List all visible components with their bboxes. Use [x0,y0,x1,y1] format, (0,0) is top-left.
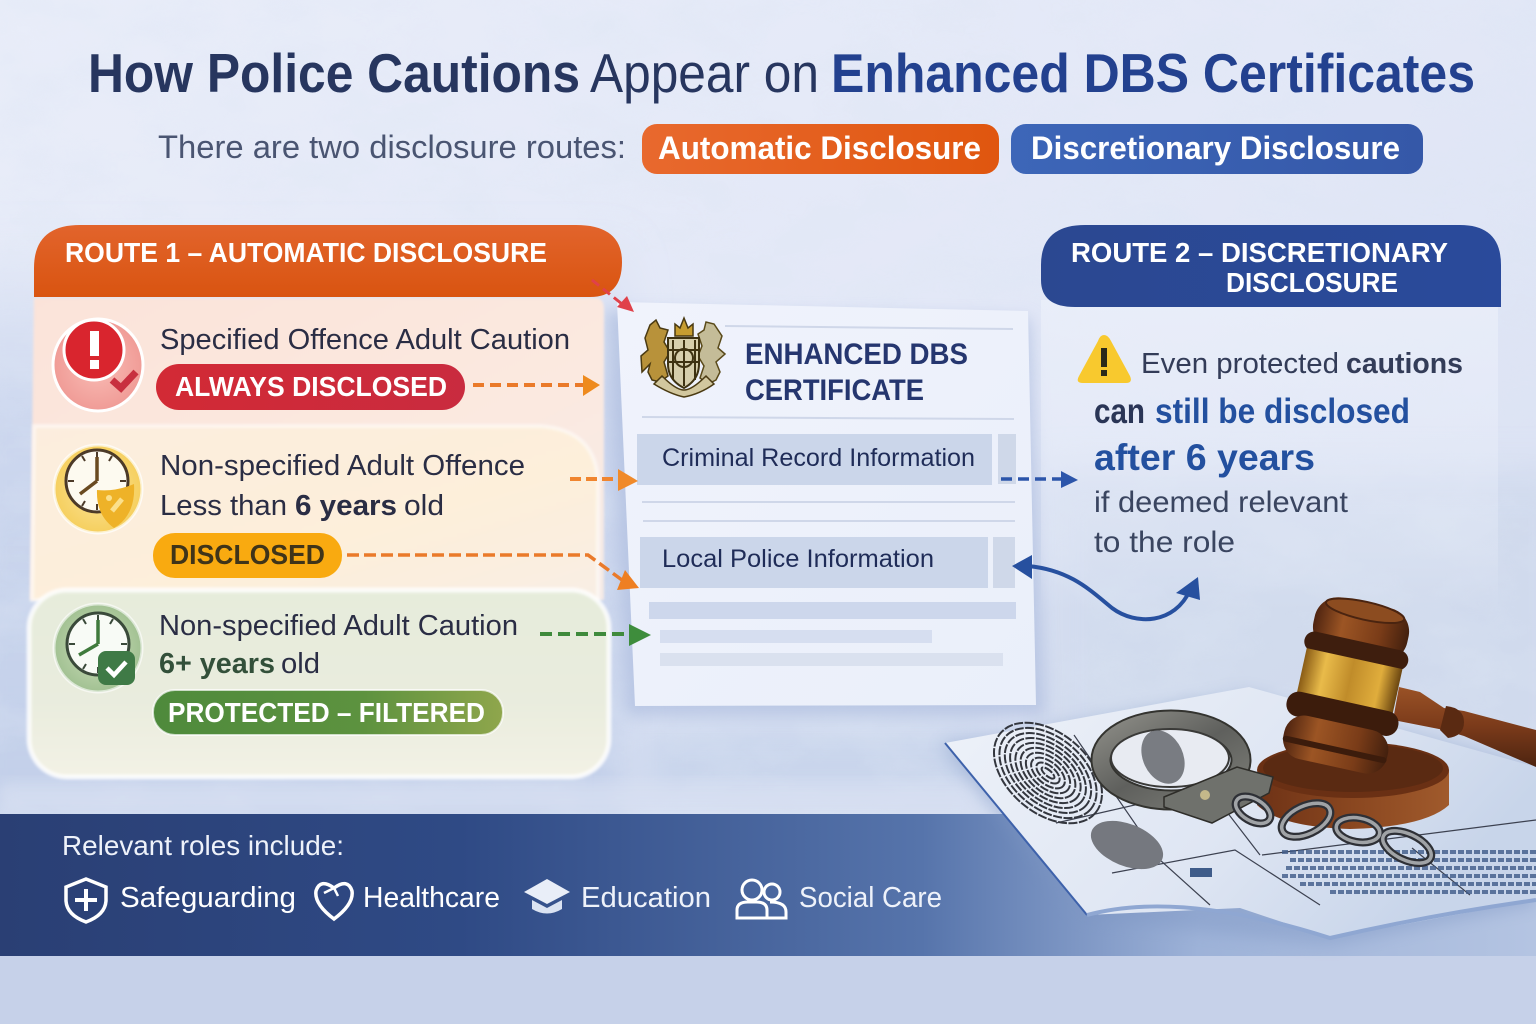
gavel head [1275,590,1423,778]
badge: protected filtered: PROTECTED – FILTERED [168,697,485,728]
warning text: can [1094,392,1145,431]
arrow: non-specified offence [570,469,638,491]
warning text: cautions [1346,348,1463,380]
fingerprint large [975,703,1121,843]
row: non-specified offence: Less than [160,490,287,522]
arrow: certificate to route 2 [1001,471,1078,488]
badge: always disclosed: ALWAYS DISCLOSED [175,371,447,402]
handcuffs [1101,720,1436,870]
title: How Police Cautions [88,42,580,104]
route 2 header: DISCLOSURE [1226,267,1398,298]
illustration: fingerprint sheet, handcuffs and gavel [940,590,1536,945]
row: local police information [640,537,1015,588]
fingerprint document [940,687,1536,945]
roles heading: Relevant roles include: [62,830,344,861]
role: healthcare [316,882,500,919]
arrow: curved route 2 to local police [1012,555,1200,619]
warning text: still be disclosed [1155,392,1410,431]
icon: alert [53,319,143,411]
arrow: protected filtered [540,624,651,646]
row: non-specified offence: 6 years [295,490,397,522]
row: non-specified offence: Non-specified Adult Offence [160,450,525,482]
icon: warning triangle [1078,335,1131,383]
role: healthcare: Healthcare [363,882,500,914]
title: Enhanced DBS Certificates [831,42,1475,104]
arrow: disclosed [347,555,639,590]
route 1 header [34,225,622,297]
row: specified offence [53,319,570,411]
card: non-specified offence background [32,426,598,600]
subtitle: disclosure routes: There are two disclosure routes: [158,129,626,165]
badge: always disclosed [156,364,465,410]
badge: disclosed [153,533,342,578]
pill: automatic disclosure: Automatic Disclosure [658,130,981,166]
warning text: after 6 years [1094,437,1315,478]
row: non-specified offence [54,445,525,578]
warning text: to the role [1094,526,1235,559]
route 1 header: ROUTE 1 – AUTOMATIC DISCLOSURE [65,237,547,268]
panel: route 2 discretionary disclosure [1041,225,1501,610]
panel body [30,298,604,600]
pill: discretionary disclosure [1011,124,1423,174]
route 2 header: ROUTE 2 – DISCRETIONARY [1071,237,1448,268]
gavel base [1257,742,1449,829]
warning text: Even protected [1141,348,1339,380]
badge: disclosed: DISCLOSED [170,539,325,570]
pill: discretionary disclosure: Discretionary Disclosure [1031,130,1400,166]
arrow: always disclosed [473,375,600,396]
certificate heading: ENHANCED DBS [745,338,968,371]
route 2 header [1041,225,1501,307]
footer band [0,814,1536,956]
role: social care: Social Care [799,882,942,914]
warning text: if deemed relevant [1094,486,1349,519]
role: social care [737,880,942,918]
row: non-specified caution: 6+ years [159,648,275,680]
certificate heading: CERTIFICATE [745,374,924,407]
row: local police information: Local Police Information [662,545,934,573]
role: safeguarding: Safeguarding [120,882,296,914]
role: education [524,879,711,914]
row: specified offence: Specified Offence Adult Caution [160,324,570,356]
badge: protected filtered [153,690,503,735]
gavel handle [1393,687,1536,767]
card: non-specified caution background [29,590,609,777]
title [88,42,1475,104]
role: safeguarding [66,879,296,922]
row: non-specified caution: Non-specified Adult Caution [159,610,518,642]
row: non-specified caution [54,604,518,735]
redacted lines [649,602,1016,666]
icon: royal crest [641,318,725,397]
panel: route 1 automatic disclosure [29,225,622,777]
title: Appear on [590,42,819,104]
icon: clock with check [54,604,142,692]
row: non-specified caution: old [281,648,320,680]
handcuff chain [1231,791,1436,870]
printed text block [1282,852,1536,892]
enhanced DBS certificate document [606,302,1046,716]
certificate heading [745,338,968,407]
icon: clock with shield [54,445,142,533]
role: education: Education [581,882,711,914]
pill: automatic disclosure [642,124,999,174]
arrow: header to document [592,280,634,312]
row: non-specified offence: old [404,490,444,522]
subtitle: disclosure routes [158,124,1423,174]
row: criminal record information: Criminal Record Information [662,444,975,472]
row: criminal record information [637,434,1016,485]
fingerprint small [1084,811,1170,879]
warning text [1094,348,1463,559]
